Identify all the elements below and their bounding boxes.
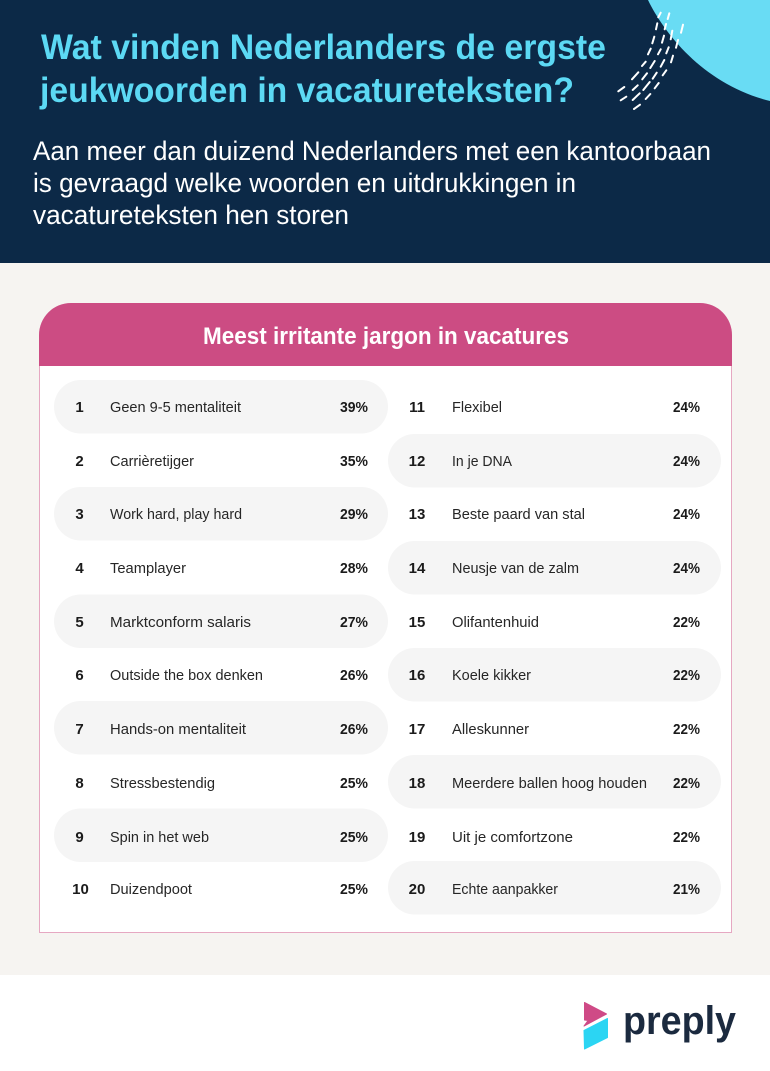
percentages column right: 22% (673, 614, 700, 631)
percentages column left: 27% (340, 614, 368, 631)
rank column right: 19 (409, 829, 425, 846)
labels column left: Carrièretijger (110, 453, 194, 470)
percentages column right: 24% (673, 506, 700, 523)
intro text: Aan meer dan duizend Nederlanders met een kantoorbaan (33, 136, 711, 166)
percentages column left: 39% (340, 399, 368, 416)
labels column right: Alleskunner (452, 721, 529, 738)
panel: jargon table (39, 303, 732, 932)
panel heading bar (39, 303, 732, 366)
panel heading: Meest irritante jargon in vacatures (203, 323, 569, 350)
rank column left: 6 (75, 667, 84, 684)
labels column left: Teamplayer (110, 560, 186, 577)
rank column left: 4 (75, 560, 84, 577)
rank column left: 3 (75, 506, 84, 523)
percentages column left: 26% (340, 667, 368, 684)
rank column left: 9 (75, 829, 84, 846)
percentages column right: 24% (673, 453, 700, 470)
percentages column right: 22% (673, 721, 700, 738)
title: Wat vinden Nederlanders de ergste (41, 28, 606, 67)
labels column left (110, 399, 263, 898)
labels column right: Uit je comfortzone (452, 829, 573, 846)
content background (0, 263, 770, 975)
rank column right: 17 (409, 721, 425, 738)
title: jeukwoorden in vacatureteksten? (39, 71, 574, 110)
rank column right: 14 (409, 560, 426, 577)
rank column right: 11 (409, 399, 425, 416)
labels column left: Marktconform salaris (110, 614, 251, 631)
percentages column left: 28% (340, 560, 368, 577)
percentages column left: 25% (340, 881, 368, 898)
labels column right: Meerdere ballen hoog houden (452, 775, 647, 792)
labels column left: Hands-on mentaliteit (110, 721, 247, 738)
percentages column left (340, 399, 368, 898)
labels column left: Geen 9-5 mentaliteit (110, 399, 242, 416)
percentages column right: 24% (673, 560, 700, 577)
percentages column right: 24% (673, 399, 700, 416)
percentages column right: 22% (673, 667, 700, 684)
labels column right (452, 399, 647, 898)
labels column right: Neusje van de zalm (452, 560, 579, 577)
percentages column left: 25% (340, 775, 368, 792)
labels column left: Spin in het web (110, 829, 209, 846)
rank column left: 7 (75, 721, 84, 738)
labels column right: Beste paard van stal (452, 506, 585, 523)
icon: preply mark (584, 1002, 608, 1049)
rank column right: 18 (409, 775, 425, 792)
labels column left: Stressbestendig (110, 775, 215, 792)
intro text: is gevraagd welke woorden en uitdrukkingen in (33, 168, 576, 198)
labels column left: Duizendpoot (110, 881, 193, 898)
rank column left: 10 (72, 881, 89, 898)
decoration: white dashes (618, 13, 683, 109)
rank column left (72, 399, 89, 898)
rank column right: 20 (409, 881, 425, 898)
percentages column left: 35% (340, 453, 368, 470)
percentages column right (673, 399, 700, 898)
labels column left: Outside the box denken (110, 667, 263, 684)
percentages column right: 22% (673, 829, 700, 846)
percentages column left: 29% (340, 506, 368, 523)
wordmark: preply (623, 999, 737, 1043)
percentages column left: 25% (340, 829, 368, 846)
rank column right: 12 (409, 453, 425, 470)
labels column right: In je DNA (452, 453, 512, 470)
row pills (54, 380, 721, 914)
labels column right: Flexibel (452, 399, 502, 416)
rank column left: 2 (75, 453, 84, 470)
intro text (33, 136, 711, 230)
title (39, 28, 606, 110)
decoration: cyan circle corner (648, 0, 770, 101)
rank column left: 8 (75, 775, 84, 792)
percentages column right: 22% (673, 775, 700, 792)
percentages column left: 26% (340, 721, 368, 738)
labels column left: Work hard, play hard (110, 506, 242, 523)
labels column right: Koele kikker (452, 667, 531, 684)
percentages column right: 21% (673, 881, 700, 898)
labels column right: Echte aanpakker (452, 881, 558, 898)
intro text: vacatureteksten hen storen (33, 200, 349, 230)
labels column right: Olifantenhuid (452, 614, 539, 631)
rank column right: 16 (409, 667, 425, 684)
logo: preply (584, 999, 737, 1049)
header band (0, 0, 770, 263)
rank column right: 15 (409, 614, 425, 631)
rank column right (409, 399, 426, 898)
rank column left: 1 (75, 399, 84, 416)
rank column left: 5 (75, 614, 84, 631)
rank column right: 13 (409, 506, 425, 523)
